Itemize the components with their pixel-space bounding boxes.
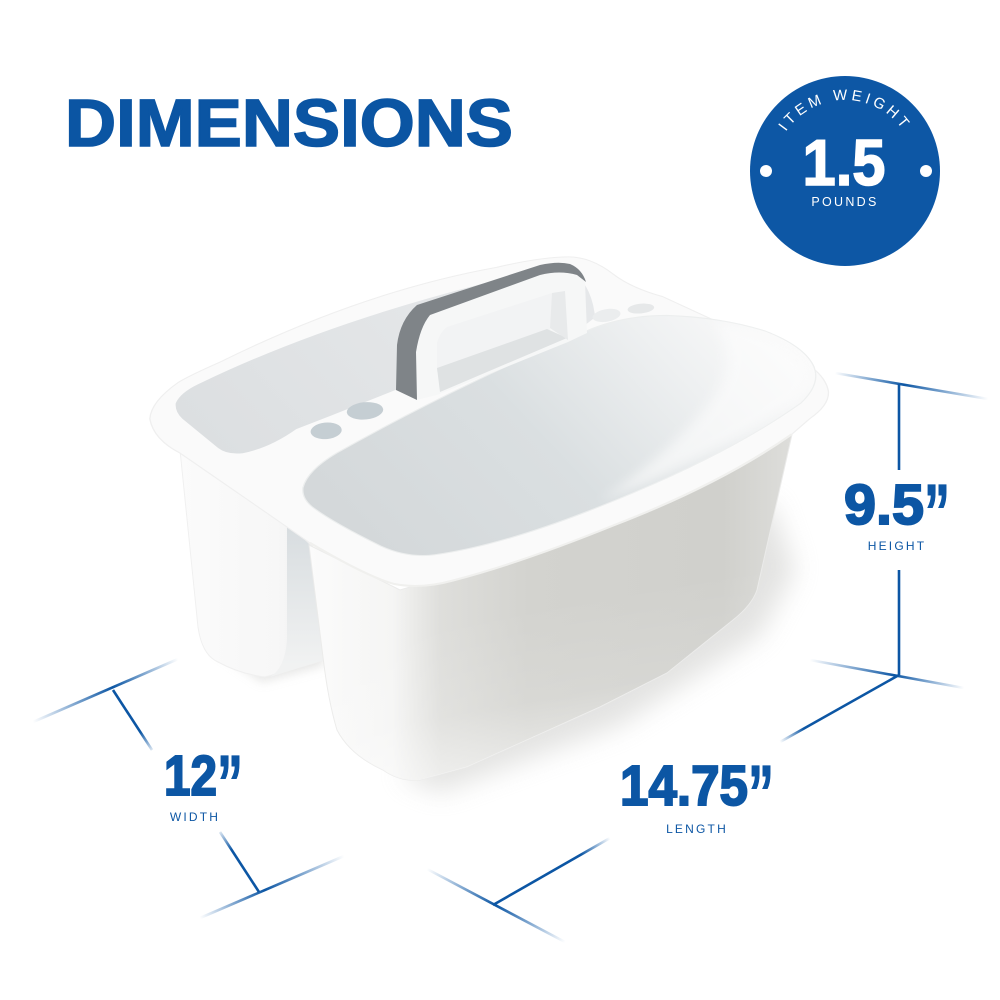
width value (164, 739, 243, 828)
left compartment body (180, 450, 325, 677)
left compartment interior (176, 272, 595, 454)
product: white plastic caddy (150, 257, 828, 792)
length left line (493, 838, 610, 905)
width value: 12 (164, 744, 217, 808)
badge: item weight (750, 76, 940, 266)
badge value: 1.5: 1.5 (802, 126, 886, 199)
badge label: item weight: ITEM WEIGHT (778, 90, 910, 131)
height lower arrow line (898, 570, 900, 675)
badge dot: left (760, 165, 772, 177)
hole: back right (627, 302, 655, 315)
handle white frame (416, 272, 587, 400)
hole: back left (591, 307, 622, 324)
height upper arrow line (898, 384, 900, 470)
right interior bright wall (600, 322, 809, 501)
right compartment front body (309, 430, 793, 780)
height value: ” (924, 468, 950, 557)
width label: WIDTH (170, 810, 220, 824)
height value: 9.5 (844, 473, 924, 537)
hole: front small (309, 421, 343, 441)
height value (844, 468, 950, 557)
handle grey grip (396, 263, 586, 400)
floor shadow: right compartment (400, 500, 795, 792)
handle right leg edge (550, 291, 568, 340)
badge dot: right (920, 165, 932, 177)
top rim (150, 257, 828, 586)
handle window upper (437, 293, 552, 388)
width upper line (113, 690, 152, 750)
rim lower edge shading (310, 434, 792, 586)
width top tick (33, 659, 178, 722)
floor shadow: left compartment (215, 630, 325, 682)
front body highlight toward base (309, 430, 793, 780)
gap inner wall (270, 522, 324, 677)
handle (396, 263, 587, 400)
title: DIMENSIONS: DIMENSIONS (65, 86, 513, 161)
length value: ” (748, 749, 774, 838)
width lower line (220, 832, 259, 892)
length value (620, 749, 774, 838)
badge unit: pounds: POUNDS (811, 195, 879, 209)
dimension: height (810, 373, 988, 688)
dimension: width (33, 659, 344, 918)
length end tick (427, 869, 565, 942)
handle window lower band (437, 329, 567, 392)
width value: ” (217, 739, 243, 828)
height label: HEIGHT (868, 539, 926, 553)
length right line (780, 675, 899, 742)
dimension: length (427, 675, 899, 942)
width bottom tick (200, 856, 344, 918)
length value: 14.75 (620, 754, 748, 818)
right compartment interior (303, 315, 816, 556)
hole: front large (345, 400, 385, 421)
height bottom tick (810, 660, 964, 688)
height top tick (835, 373, 988, 399)
length label: LENGTH (666, 822, 728, 836)
